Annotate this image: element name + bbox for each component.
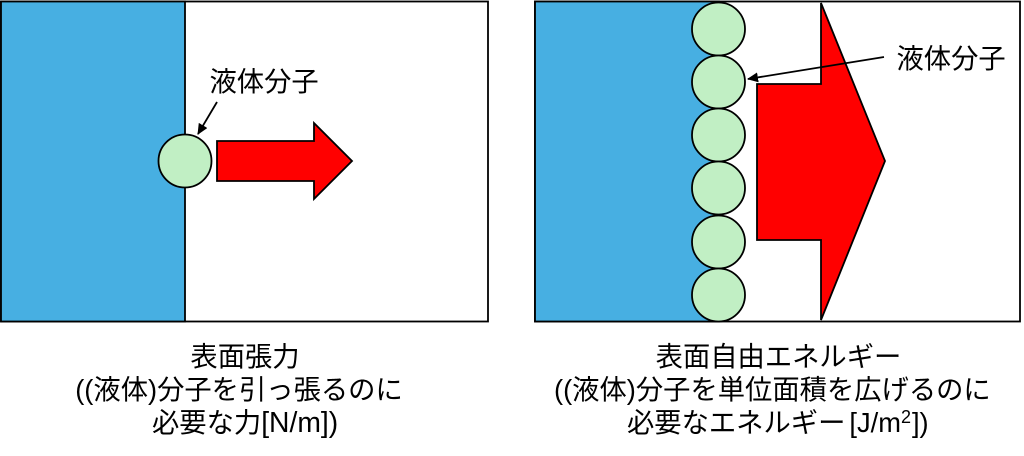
panel: surface free energy xyxy=(535,2,1020,322)
caption: surface free energy xyxy=(554,341,991,438)
molecule xyxy=(158,134,212,188)
caption: surface tension: 表面張力 xyxy=(190,341,300,372)
arrow: energy xyxy=(757,3,885,320)
label: liquid molecule: 液体分子 xyxy=(896,43,1006,74)
liquid: surface tension xyxy=(1,2,185,322)
caption: surface tension xyxy=(75,341,403,438)
liquid: surface free energy xyxy=(535,2,719,322)
caption: surface free energy: 表面自由エネルギー xyxy=(656,341,901,372)
caption: surface tension: ((液体)分子を引っ張るのに xyxy=(75,374,403,405)
caption: surface tension: 必要な力[N/m]) xyxy=(152,406,338,438)
caption: surface free energy: 必要なエネルギー[J/m xyxy=(627,407,901,438)
caption: surface free energy: 2 xyxy=(901,407,911,427)
caption: surface free energy: ((液体)分子を単位面積を広げるのに xyxy=(554,374,991,405)
molecule row xyxy=(692,2,745,322)
panel: surface tension xyxy=(1,2,488,322)
caption: surface free energy: ]) xyxy=(912,407,929,438)
leader arrow: molecule xyxy=(748,57,884,79)
leader arrow: molecule xyxy=(198,102,217,134)
label: liquid molecule: 液体分子 xyxy=(210,66,319,97)
arrow: pulling force xyxy=(217,123,352,199)
